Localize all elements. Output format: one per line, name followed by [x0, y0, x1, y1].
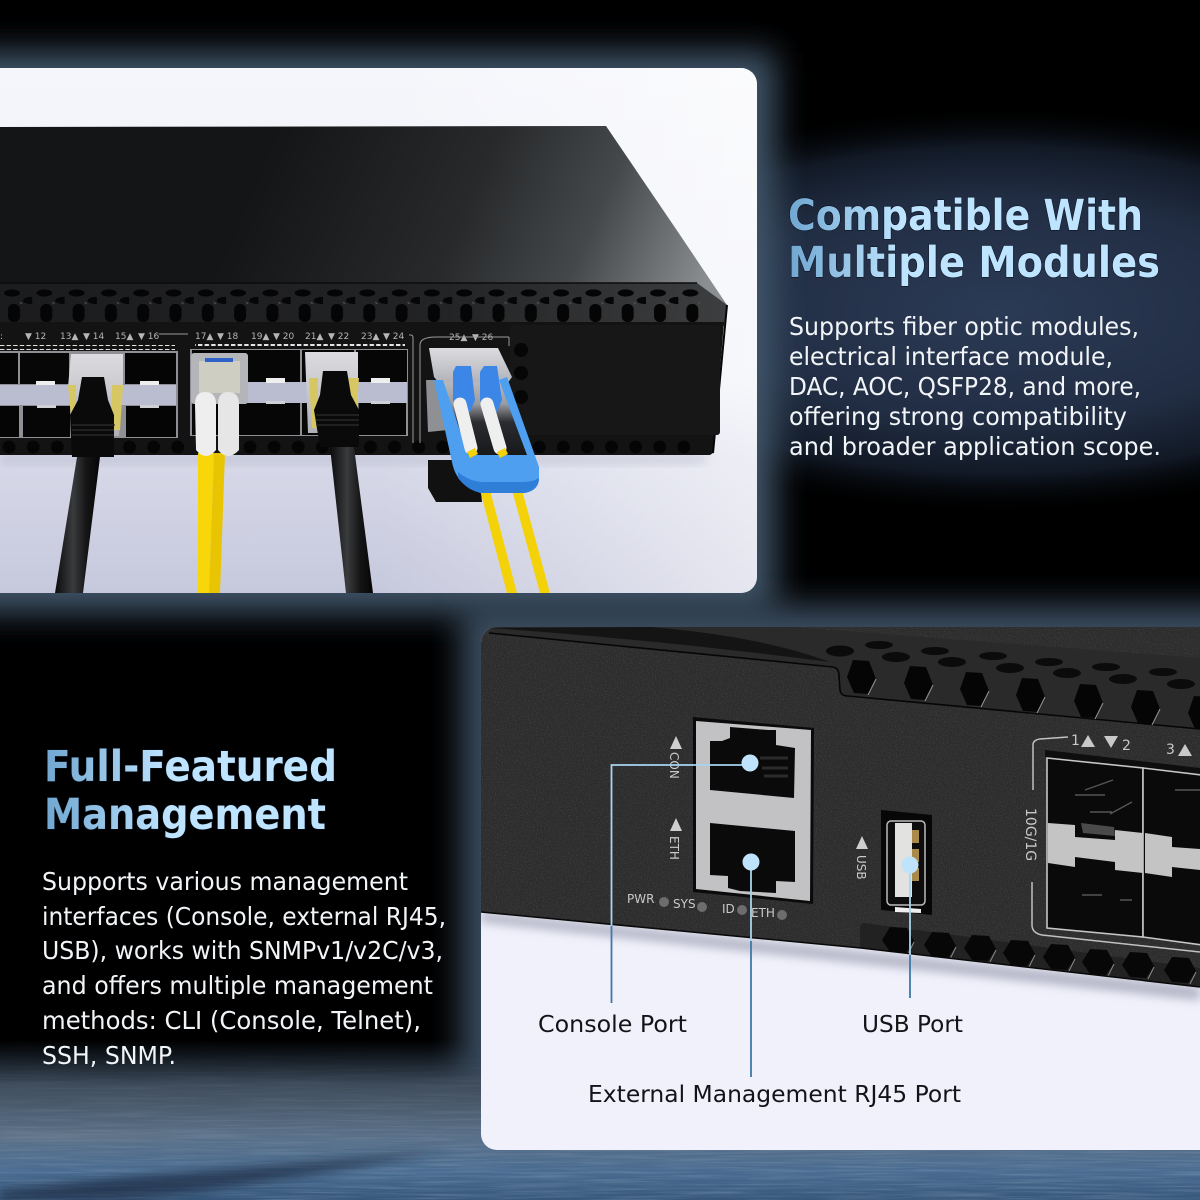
text block: module compatibility [789, 312, 1161, 461]
text block: module compatibility: electrical interface module, [789, 342, 1113, 371]
SFP cage: 10G/1G [1022, 808, 1038, 861]
SFP cage: 3 [1166, 742, 1175, 758]
switch front lip [0, 283, 727, 326]
ethernet RJ45 jack [710, 823, 795, 893]
switch body [481, 626, 1200, 987]
port number labels: ▼ 16 [138, 332, 160, 342]
text block: management features: USB), works with SNMPv1/v2C/v3, [42, 936, 443, 965]
port number labels: : [0, 332, 3, 342]
SFP cage: 2 [1122, 738, 1131, 754]
port number labels: ▼ 18 [217, 332, 239, 342]
label: console port: Console Port [538, 1010, 687, 1038]
port labels rotated: CON [667, 752, 681, 779]
console RJ45 jack [710, 727, 795, 798]
leader line: external management [742, 854, 760, 1077]
port number labels: ▼ 22 [328, 332, 349, 342]
text block: module compatibility: DAC, AOC, QSFP28, and more, [789, 372, 1141, 401]
switch front face [0, 322, 724, 455]
label: external management port: External Management RJ45 Port [588, 1080, 961, 1108]
SFP cage [1022, 733, 1200, 952]
text block: management features: methods: CLI (Console, Telnet), [42, 1006, 421, 1035]
device shadow [481, 912, 1200, 1000]
RJ45 port plate [693, 717, 814, 904]
heading: compatible with multiple modules: Multiple Modules [788, 238, 1160, 288]
heading: full-featured management [44, 742, 337, 840]
switch top surface [0, 126, 727, 305]
status LEDs [627, 892, 787, 920]
upper vent holes [826, 641, 1195, 689]
leader line: console [612, 754, 758, 1003]
port labels rotated [667, 736, 868, 880]
port number labels: ▼ 12 [25, 332, 46, 342]
status LEDs: PWR [627, 892, 654, 906]
text block: management features: SSH, SNMP. [42, 1041, 176, 1070]
inset face [714, 370, 720, 435]
port number labels: 21▲ [305, 332, 323, 342]
port labels rotated: USB [854, 855, 868, 880]
blue pull-tab LC module with fibers [426, 348, 550, 593]
side holes [514, 343, 528, 404]
status LEDs: ETH [751, 906, 775, 920]
lower lip with hex vents [860, 923, 1200, 987]
text block: module compatibility: offering strong compatibility [789, 402, 1127, 431]
SFP cage: 1 [1071, 733, 1080, 749]
port number labels: 23▲ [361, 332, 379, 342]
port number labels: ▼ 20 [273, 332, 295, 342]
heading: compatible with multiple modules [788, 191, 1160, 288]
vent rows [0, 285, 700, 457]
port number labels: ▼ 14 [83, 332, 105, 342]
heading: full-featured management: Full-Featured [44, 742, 337, 792]
status LEDs: ID [722, 902, 735, 916]
text block: management features: Supports various management [42, 867, 408, 896]
hex vents top [847, 660, 1200, 731]
panel: management ports [481, 626, 1200, 1150]
RJ45 module and black cable, left [55, 354, 123, 593]
heading: compatible with multiple modules: Compatible With [788, 191, 1143, 241]
port number labels: 25▲ [449, 333, 467, 343]
status LEDs: SYS [673, 897, 696, 911]
text block: management features: interfaces (Console, external RJ45, [42, 902, 446, 931]
left SFP cage [0, 345, 178, 438]
heading: full-featured management: Management [44, 790, 326, 840]
label: USB port: USB Port [862, 1010, 963, 1038]
port number labels [0, 332, 509, 443]
port labels rotated: ETH [667, 836, 681, 860]
middle SFP cage [190, 344, 408, 436]
text block: management features: and offers multiple management [42, 971, 433, 1000]
leader line: USB [902, 856, 918, 998]
port number labels: 15▲ [115, 332, 133, 342]
port number labels: 17▲ [195, 332, 213, 342]
panel: switch with modules [0, 68, 757, 593]
port number labels: ▼ 24 [383, 332, 405, 342]
upper lip [489, 626, 1200, 729]
USB port [881, 810, 932, 915]
port number labels: ▼ 26 [472, 333, 494, 343]
floor shadow [0, 455, 712, 463]
text block: module compatibility: Supports fiber optic modules, [789, 312, 1139, 341]
LC fiber module with yellow fibers [191, 353, 248, 593]
port number labels: 19▲ [251, 332, 269, 342]
RJ45 module and black cable, right [305, 352, 373, 593]
port number labels: 13▲ [60, 332, 78, 342]
text block: module compatibility: and broader application scope. [789, 432, 1161, 461]
text block: management features [42, 867, 446, 1070]
